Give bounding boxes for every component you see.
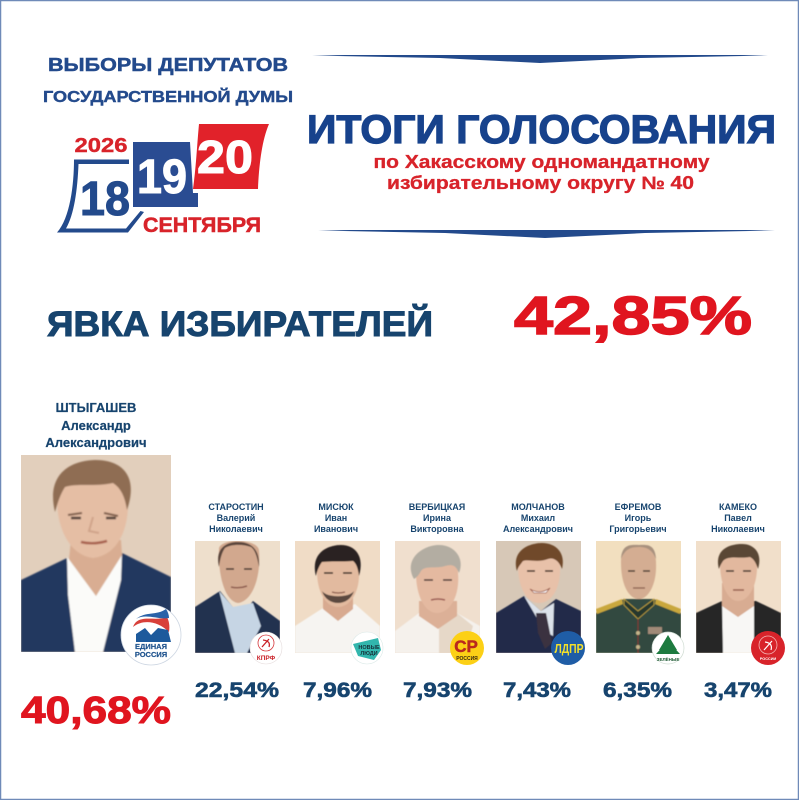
party badge: Just Russia: СР [454,637,478,656]
name: Викторовна [410,524,465,534]
logo: red day block [193,124,269,189]
subtitle line 1: по Хакасскому одномандатному [374,152,710,172]
result: 3,47% [704,679,772,702]
candidate: Shtygashev [21,400,181,732]
heading: elections of deputies: ВЫБОРЫ ДЕПУТАТОВ [48,54,288,75]
name: Александрович [45,435,147,450]
candidate: Kameko [696,502,785,702]
top decorative rule [312,55,768,63]
result: 7,93% [403,679,472,702]
name: Николаевич [209,524,263,534]
logo: blue day block [133,142,198,207]
party badge: KPRF [250,632,282,664]
party badge: New People: НОВЫЕ [358,645,380,651]
name: Иван [325,513,347,523]
result: 7,96% [303,679,372,702]
party badge: Greens [652,632,684,664]
bottom decorative rule [318,230,775,238]
result: 40,68% [21,690,171,732]
name: Игорь [625,513,652,523]
header: results title block [307,55,776,238]
logo: month: СЕНТЯБРЯ [143,214,261,237]
name: Александр [61,418,131,433]
logo: year: 2026 [74,135,128,157]
name: ШТЫГАШЕВ [56,400,136,415]
candidate: Misyuk [295,502,383,702]
turnout label: ЯВКА ИЗБИРАТЕЛЕЙ [47,304,433,344]
party badge: United Russia: ЕДИНАЯ [135,642,167,651]
name: Валерий [217,513,255,523]
header: election logo block [43,54,293,237]
party badge: LDPR: ЛДПР [554,641,584,656]
photo [295,541,380,653]
heading: state duma: ГОСУДАРСТВЕННОЙ ДУМЫ [43,88,293,106]
photo [596,541,681,653]
party badge: KPRF: КПРФ [257,655,276,662]
photo [496,541,581,653]
party badge: Just Russia [450,631,484,665]
party badge: Communists of Russia: РОССИИ [760,657,776,661]
photo [696,541,781,653]
party badge: United Russia: РОССИЯ [135,650,167,659]
name: Александрович [503,524,573,534]
logo: calendar outline [57,160,144,232]
result: 7,43% [503,679,571,702]
name: КАМЕКО [719,502,757,512]
party badge: Just Russia: РОССИЯ [456,656,478,662]
name: МИСЮК [318,502,354,512]
name: Михаил [521,513,555,523]
party badge: New People [351,632,383,664]
name: Николаевич [711,524,765,534]
name: Иванович [314,524,358,534]
photo [21,455,171,652]
party badge: New People: ЛЮДИ [360,651,378,657]
party badge: LDPR [551,631,585,665]
name: Ирина [423,513,452,523]
party badge: United Russia [121,605,181,665]
candidate: Efremov [596,502,684,702]
result: 6,35% [603,679,672,702]
candidate: Verbitskaya [395,502,484,702]
party badge: Greens: ЗЕЛЁНЫЕ [657,656,679,662]
name: ВЕРБИЦКАЯ [409,502,465,512]
logo: day 19: 19 [137,151,187,204]
candidate: Starostin [195,502,282,702]
logo: day 18: 18 [80,173,130,226]
result: 22,54% [195,679,279,702]
subtitle line 2: избирательному округу № 40 [387,173,694,193]
photo [195,541,280,653]
party badge: Communists of Russia [751,631,785,665]
name: Павел [724,513,752,523]
name: ЕФРЕМОВ [615,502,662,512]
name: СТАРОСТИН [208,502,264,512]
photo [395,541,480,653]
turnout value: 42,85% [514,286,752,346]
title: ИТОГИ ГОЛОСОВАНИЯ [307,108,776,152]
candidate: Molchanov [496,502,585,702]
logo: day 20: 20 [197,131,253,183]
name: Григорьевич [609,524,667,534]
name: МОЛЧАНОВ [511,502,565,512]
